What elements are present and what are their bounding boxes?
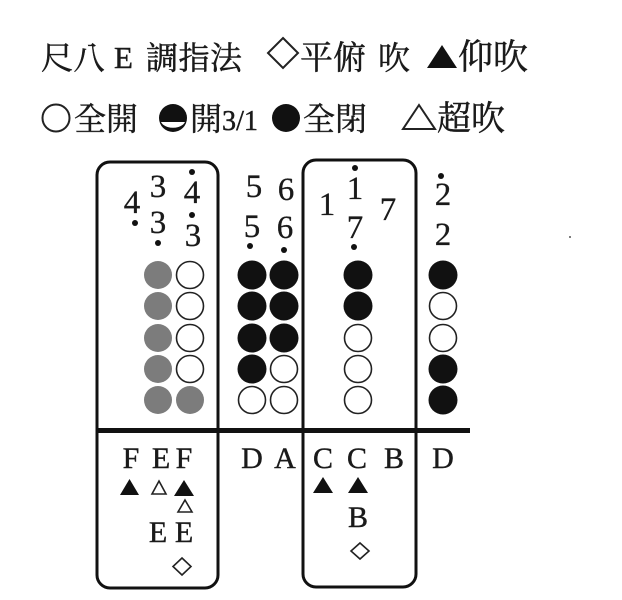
notation numbers: 5 and 6: 6 xyxy=(278,172,294,208)
pitch letters and marks: left group: E xyxy=(152,442,170,475)
pitch letters and marks: middle group: C xyxy=(347,442,367,475)
notation numbers: right: 2 xyxy=(435,217,451,253)
legend: half circle open one third: 3/1 xyxy=(222,105,258,137)
legend: open circle fully open: 全開 xyxy=(74,101,138,137)
pitch letters and marks: left group: E xyxy=(175,516,193,549)
notation numbers: 5 and 6: 5 xyxy=(246,169,262,205)
notation numbers: middle group: 1 xyxy=(319,187,335,223)
finger holes: column 5 xyxy=(344,260,372,414)
legend: outline triangle over-blow: 超吹 xyxy=(437,100,505,138)
notation numbers: middle group: 7 xyxy=(380,192,396,228)
notation numbers: right xyxy=(435,173,451,253)
pitch letters and marks: left group: F xyxy=(176,442,192,475)
notation numbers: left group: 3 xyxy=(150,205,166,241)
pitch letters: D and A xyxy=(241,442,296,475)
notation numbers: 5 and 6 xyxy=(244,169,294,253)
notation numbers: left group: 4 xyxy=(124,185,140,221)
notation numbers: left group: 3 xyxy=(185,218,201,254)
pitch letters and marks: middle group: B xyxy=(384,442,404,475)
title: shakuhachi E fingering: 調指法 xyxy=(146,40,243,76)
pitch letters and marks: middle group: C xyxy=(313,442,333,475)
notation numbers: left group: 4 xyxy=(184,175,200,211)
pitch letters: D and A: D xyxy=(241,442,263,475)
legend: half circle open one third xyxy=(159,101,258,137)
title: shakuhachi E fingering: E xyxy=(114,40,133,75)
title: shakuhachi E fingering xyxy=(41,40,243,76)
legend: diamond flat blow xyxy=(268,38,410,77)
legend: filled triangle raised blow xyxy=(427,38,528,77)
legend: diamond flat blow: 吹 xyxy=(378,40,410,76)
notation numbers: 5 and 6: 5 xyxy=(244,209,260,245)
legend: open circle fully open xyxy=(42,101,138,137)
pitch letters and marks: middle group: B xyxy=(348,501,368,534)
group box: left xyxy=(97,162,218,588)
notation numbers: 5 and 6: 6 xyxy=(277,210,293,246)
title: shakuhachi E fingering: 尺八 xyxy=(41,40,105,76)
finger holes: column 3 xyxy=(238,260,266,414)
notation numbers: left group xyxy=(124,169,201,254)
notation numbers: right: 2 xyxy=(435,177,451,213)
pitch letters and marks: left group xyxy=(120,442,194,575)
legend: filled triangle raised blow: 仰吹 xyxy=(458,38,528,77)
pitch letter: right D: D xyxy=(432,442,454,475)
legend: diamond flat blow: 平俯 xyxy=(300,40,366,77)
notation numbers: middle group xyxy=(319,165,396,250)
legend: filled circle fully closed xyxy=(272,101,367,137)
pitch letters and marks: left group: E xyxy=(149,516,167,549)
pitch letters and marks: middle group xyxy=(313,442,404,559)
finger holes: column 2 xyxy=(176,262,204,414)
legend: outline triangle over-blow xyxy=(403,100,505,138)
legend: half circle open one third: 開 xyxy=(190,101,222,137)
finger holes: column 6 xyxy=(428,260,458,414)
pitch letters: D and A: A xyxy=(274,442,296,475)
stray speck xyxy=(569,236,571,238)
legend: filled circle fully closed: 全閉 xyxy=(303,101,367,137)
notation numbers: left group: 3 xyxy=(150,169,166,205)
divider bar xyxy=(96,428,470,433)
finger holes: column 1 half-shaded xyxy=(144,261,172,414)
finger holes: column 4 xyxy=(270,260,298,414)
notation numbers: middle group: 1 xyxy=(347,171,363,207)
notation numbers: middle group: 7 xyxy=(347,210,363,246)
group box: middle xyxy=(303,160,416,587)
pitch letters and marks: left group: F xyxy=(123,442,139,475)
